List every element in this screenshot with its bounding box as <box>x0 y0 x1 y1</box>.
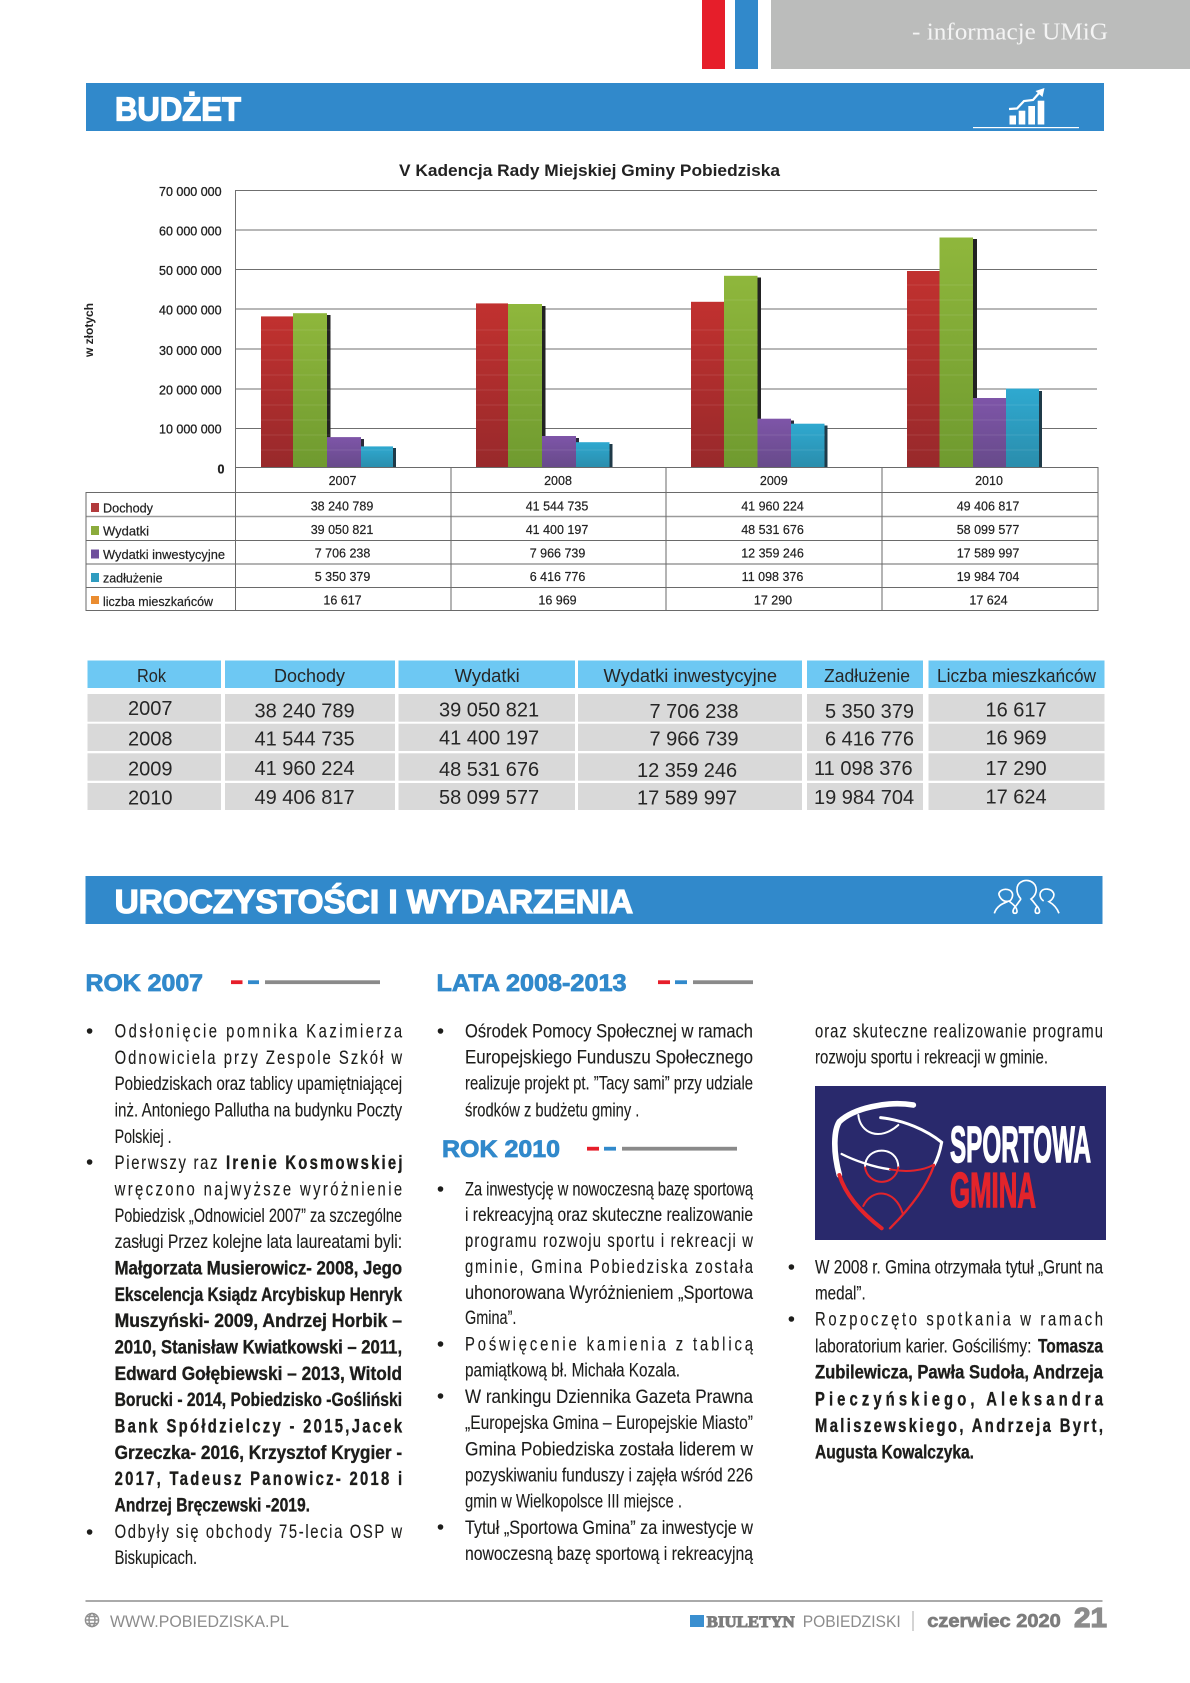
table header row: Rok <box>137 666 167 686</box>
data table values: 5 350 379 <box>315 570 370 584</box>
text column: rok 2007 list: Polskiej . <box>115 1127 172 1148</box>
text: column three list: Zubilewicza, Pawła Sudoła, Andrzeja <box>815 1362 1103 1384</box>
footer publication name: POBIEDZISKI <box>803 1613 901 1631</box>
text column: rok 2007 list: 2017, Tadeusz Panowicz- 2018 i <box>115 1468 402 1490</box>
data table values: 2007 <box>329 474 356 488</box>
text column: rok 2007 list: Odbyły się obchody 75-lecia OSP w <box>115 1521 403 1542</box>
footer website: WWW.POBIEDZISKA.PL <box>110 1613 289 1631</box>
table body rows: 16 617 <box>986 700 1047 722</box>
section heading: rok 2010 <box>442 1136 737 1163</box>
data table legend <box>91 502 225 609</box>
data table values: 16 617 <box>323 594 362 608</box>
text column: rok 2007 list: Pobiedziskach oraz tablicy upamiętniającej <box>115 1074 402 1095</box>
section heading: rok 2007 <box>86 970 380 997</box>
table body rows: 41 960 224 <box>254 758 355 780</box>
table header row: Liczba mieszkańców <box>937 666 1097 686</box>
section heading: rok 2007: ROK 2007 <box>86 970 203 997</box>
footer publication name: BIULETYN <box>707 1614 795 1631</box>
text column: rok 2010 list: gminie, Gmina Pobiedziska została <box>465 1256 753 1277</box>
y axis labels: 60 000 000 <box>159 224 222 238</box>
table body rows: 58 099 577 <box>439 787 539 809</box>
table body rows: 48 531 676 <box>439 759 539 781</box>
text column: lata 2008-2013 list: realizuje projekt pt. ”Tacy sami” przy udziale <box>465 1074 753 1094</box>
text column: lata 2008-2013 list: środków z budżetu gminy . <box>465 1100 639 1122</box>
icon: three people <box>994 880 1059 913</box>
bars: 2008 <box>476 303 612 468</box>
text column: lata 2008-2013 list: Europejskiego Funduszu Społecznego <box>465 1048 753 1068</box>
text column: rok 2010 list: nowoczesną bazę sportową i rekreacyjną <box>465 1544 753 1565</box>
text column: rok 2007 list: Muszyński- 2009, Andrzej Horbik – <box>115 1311 402 1332</box>
text column: rok 2010 list: „Europejska Gmina – Europejskie Miasto” <box>465 1413 753 1434</box>
text: column three list <box>789 1258 1103 1464</box>
table body rows: 2008 <box>128 729 172 751</box>
text: column three continuation: oraz skuteczne realizowanie programu <box>815 1021 1103 1042</box>
text: column three list: medal”. <box>815 1284 866 1304</box>
text: column three list: W 2008 r. Gmina otrzymała tytuł „Grunt na <box>815 1258 1103 1278</box>
y axis labels: 10 000 000 <box>159 422 222 436</box>
text column: rok 2010 list: Tytuł „Sportowa Gmina” za inwestycje w <box>465 1518 753 1539</box>
data table values: 17 624 <box>969 594 1008 608</box>
data table legend: Wydatki <box>103 524 149 538</box>
y axis labels: 70 000 000 <box>159 185 222 199</box>
y axis title: w złotych <box>82 303 96 358</box>
data table values: 11 098 376 <box>742 570 803 584</box>
banner: uroczystości i wydarzenia <box>86 876 1102 924</box>
text column: rok 2007 list: Edward Gołębiewski – 2013, Witold <box>115 1364 402 1385</box>
table body rows: 16 969 <box>986 727 1047 749</box>
text column: rok 2007 list: Borucki - 2014, Pobiedzisko -Gośliński <box>115 1390 402 1411</box>
table body rows: 7 706 238 <box>650 701 738 723</box>
data table values: 12 359 246 <box>741 546 804 560</box>
text: column three list: laboratorium karier. Gościliśmy: <box>815 1336 1032 1358</box>
data table values: 41 960 224 <box>741 500 804 514</box>
y axis labels: 50 000 000 <box>159 264 222 278</box>
text: column three list: Pieczyńskiego, Aleksandra <box>815 1389 1103 1410</box>
section heading: lata 2008-2013 <box>436 970 753 997</box>
table header row <box>88 660 1104 688</box>
text column: rok 2007 list: Małgorzata Musierowicz- 2008, Jego <box>115 1258 402 1280</box>
data table values: 16 969 <box>538 594 577 608</box>
icon: globe <box>85 1613 99 1627</box>
text: column three list: Maliszewskiego, Andrzeja Byrt, <box>815 1415 1103 1436</box>
text column: lata 2008-2013 list: Ośrodek Pomocy Społecznej w ramach <box>465 1022 753 1042</box>
table body rows: 5 350 379 <box>825 701 914 723</box>
icon: rising bar chart <box>973 88 1079 128</box>
header tab: blue stripe <box>735 0 758 69</box>
text column: rok 2007 list: Odsłonięcie pomnika Kazimierza <box>115 1021 403 1042</box>
table body rows <box>88 694 1104 810</box>
data table grid <box>86 467 1098 611</box>
table body rows: 2007 <box>128 698 172 720</box>
data table values: 17 290 <box>754 594 792 608</box>
table body rows: 17 290 <box>986 758 1047 780</box>
y axis labels <box>159 185 224 476</box>
text column: rok 2010 list: W rankingu Dziennika Gazeta Prawna <box>465 1387 753 1408</box>
heading: budżet: BUDŻET <box>115 92 241 129</box>
y axis labels: 30 000 000 <box>159 344 222 358</box>
text column: rok 2010 list: pamiątkową bł. Michała Kozala. <box>465 1360 680 1382</box>
table body rows: 41 544 735 <box>254 728 355 750</box>
table body rows: 2009 <box>128 758 172 780</box>
logo: sportowa gmina: GMINA <box>950 1164 1036 1218</box>
text column: rok 2010 list: Poświęcenie kamienia z tablicą <box>465 1334 753 1355</box>
text column: rok 2007 list: Bank Spółdzielczy - 2015,Jacek <box>115 1416 403 1437</box>
text column: rok 2007 list: inż. Antoniego Pallutha na budynku Poczty <box>115 1100 402 1122</box>
text column: rok 2010 list: i rekreacyjną oraz skuteczne realizowanie <box>465 1205 753 1226</box>
table body rows: 17 589 997 <box>637 788 737 810</box>
data table values: 7 966 739 <box>530 546 585 560</box>
footer date: czerwiec 2020 <box>927 1611 1061 1631</box>
banner: budżet <box>86 83 1104 131</box>
table body rows: 12 359 246 <box>637 760 737 782</box>
text column: rok 2007 list <box>87 1021 403 1569</box>
section heading: lata 2008-2013: LATA 2008-2013 <box>436 970 626 997</box>
text column: rok 2010 list: gmin w Wielkopolsce III miejsce . <box>465 1492 682 1512</box>
footer <box>85 1600 1107 1633</box>
data table legend: liczba mieszkańców <box>103 595 214 609</box>
text column: rok 2007 list: Irenie Kosmowskiej <box>226 1152 403 1174</box>
footer publication name <box>707 1613 901 1631</box>
data table values: 41 400 197 <box>526 523 588 537</box>
text column: rok 2010 list: Gmina Pobiedziska została liderem w <box>465 1440 753 1460</box>
text column: rok 2007 list: Ekscelencja Ksiądz Arcybiskup Henryk <box>115 1285 402 1306</box>
table header row: Wydatki <box>455 666 520 686</box>
data table values: 19 984 704 <box>957 570 1019 584</box>
text: column three list: Augusta Kowalczyka. <box>815 1442 974 1464</box>
text column: rok 2010 list <box>438 1180 754 1565</box>
data table values: 2009 <box>760 474 788 488</box>
y axis labels: 20 000 000 <box>159 384 222 398</box>
text column: rok 2007 list: Odnowiciela przy Zespole Szkół w <box>115 1047 403 1068</box>
text column: rok 2007 list: 2010, Stanisław Kwiatkowski – 2011, <box>115 1338 402 1358</box>
table body rows: 2010 <box>128 788 172 810</box>
table body rows: 19 984 704 <box>814 787 914 809</box>
text: column three continuation <box>815 1021 1103 1068</box>
table body rows: 49 406 817 <box>254 787 355 809</box>
page number: 21 <box>1074 1602 1107 1633</box>
text column: lata 2008-2013 list <box>438 1022 753 1122</box>
bars: 2009 <box>691 276 828 468</box>
text column: rok 2010 list: pozyskiwaniu funduszy i zajęła wśród 226 <box>465 1466 753 1486</box>
data table legend: zadłużenie <box>103 572 163 586</box>
table body rows: 41 400 197 <box>439 727 539 749</box>
y axis labels: 40 000 000 <box>159 304 222 318</box>
text: column three list: Tomasza <box>1038 1336 1103 1358</box>
data table values: 38 240 789 <box>311 500 373 514</box>
data table values: 7 706 238 <box>315 546 370 560</box>
table body rows: 6 416 776 <box>825 728 914 750</box>
data table legend: Wydatki inwestycyjne <box>103 548 225 562</box>
logo: sportowa gmina <box>815 1086 1106 1240</box>
table header row: Wydatki inwestycyjne <box>604 666 777 686</box>
text column: rok 2007 list: wręczono najwyższe wyróżnienie <box>114 1179 402 1200</box>
data table values: 41 544 735 <box>526 500 588 514</box>
text column: rok 2010 list: Gmina”. <box>465 1308 516 1329</box>
data table values: 2010 <box>975 474 1003 488</box>
text column: rok 2007 list: Grzeczka- 2016, Krzysztof Krygier - <box>115 1443 402 1464</box>
table body rows: 17 624 <box>986 787 1047 809</box>
footer square marker <box>690 1615 704 1627</box>
bars: 2010 <box>907 238 1042 468</box>
header tab: red stripe <box>702 0 725 69</box>
header tab: section label: - informacje UMiG <box>912 20 1108 46</box>
header tab: section label <box>771 0 1190 69</box>
table body rows: 39 050 821 <box>439 700 539 722</box>
y axis labels: 0 <box>218 462 224 476</box>
text: column three list: Rozpoczęto spotkania w ramach <box>815 1309 1103 1330</box>
chart: V Kadencja budget columns with data table <box>82 161 1098 611</box>
text column: rok 2007 list: zasługi Przez kolejne lata laureatami byli: <box>115 1232 402 1253</box>
table header row: Dochody <box>274 666 345 686</box>
data table values <box>311 474 1019 608</box>
data table values: 17 589 997 <box>957 546 1019 560</box>
data table values: 49 406 817 <box>957 500 1019 514</box>
bars: 2007 <box>261 313 396 468</box>
text column: rok 2010 list: programu rozwoju sportu i rekreacji w <box>465 1230 754 1251</box>
data table values: 6 416 776 <box>530 570 585 584</box>
bar stripes <box>261 285 1039 450</box>
text column: rok 2007 list: Pobiedzisk „Odnowiciel 2007” za szczególne <box>115 1206 402 1227</box>
heading: uroczystości i wydarzenia: UROCZYSTOŚCI I WYDARZENIA <box>115 883 633 921</box>
data table values: 39 050 821 <box>311 523 373 537</box>
table body rows: 11 098 376 <box>814 758 913 780</box>
text column: rok 2007 list: Pierwszy raz <box>115 1152 218 1174</box>
text column: rok 2007 list: Biskupicach. <box>115 1548 197 1569</box>
data table values: 2008 <box>544 474 572 488</box>
table: budget figures <box>88 660 1104 810</box>
table body rows: 38 240 789 <box>254 700 355 722</box>
table header row: Zadłużenie <box>824 666 910 686</box>
text: column three continuation: rozwoju sportu i rekreacji w gminie. <box>815 1048 1048 1068</box>
text column: rok 2010 list: Za inwestycję w nowoczesną bazę sportową <box>465 1180 753 1200</box>
data table values: 58 099 577 <box>957 523 1019 537</box>
data table values: 48 531 676 <box>741 523 804 537</box>
text column: rok 2010 list: uhonorowana Wyróżnieniem „Sportowa <box>465 1283 753 1304</box>
table body rows: 7 966 739 <box>650 729 738 751</box>
data table legend: Dochody <box>103 502 154 516</box>
section heading: rok 2010: ROK 2010 <box>442 1136 560 1163</box>
text column: rok 2007 list: Andrzej Bręczewski -2019. <box>115 1495 310 1516</box>
chart title: V Kadencja Rady Miejskiej Gminy Pobiedziska <box>399 161 781 180</box>
